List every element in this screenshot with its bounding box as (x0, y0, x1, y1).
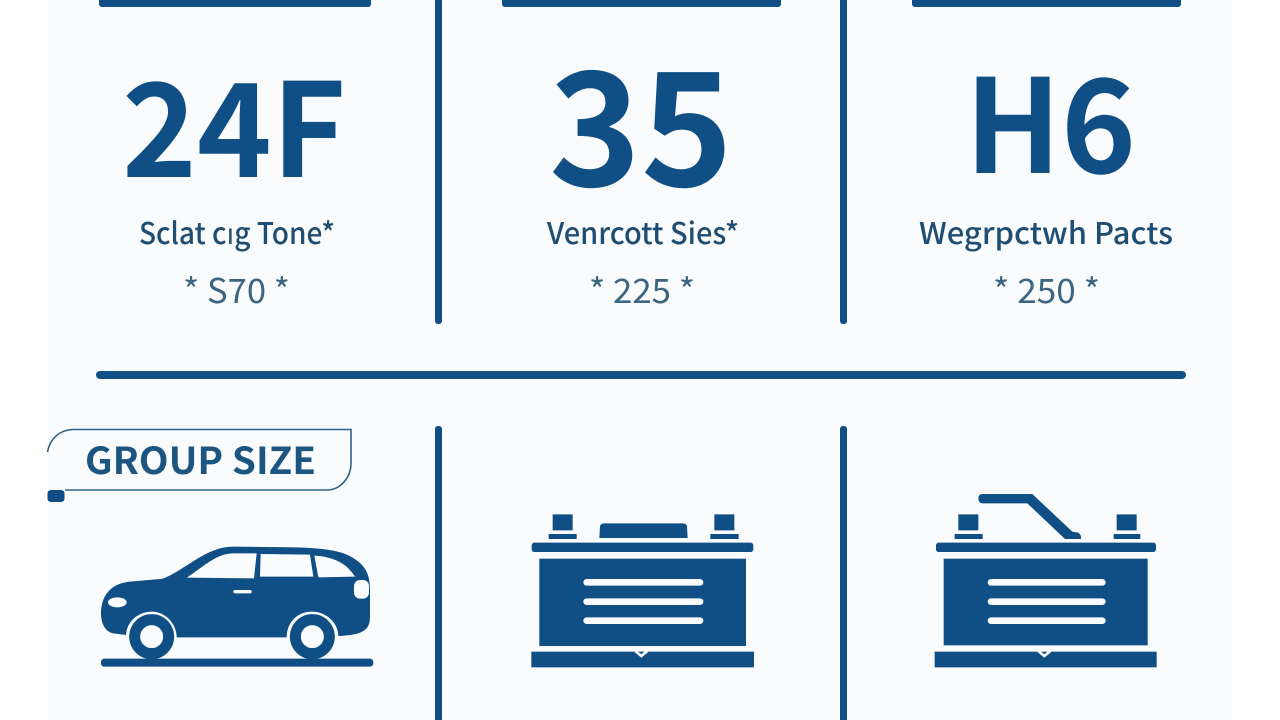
car body (101, 547, 370, 637)
panel: 24F column (99, 0, 371, 313)
value: 24F: * S70 * (183, 264, 290, 313)
lid (936, 543, 1156, 552)
big code: 24F: 24F (122, 27, 346, 215)
base notch (635, 651, 647, 656)
headlight (108, 597, 127, 607)
top bar (912, 0, 1181, 7)
big code: 35: 35 (549, 3, 733, 232)
handle (978, 494, 1081, 539)
icon: battery with handle (935, 494, 1157, 667)
front wheel (135, 620, 169, 654)
centre cap (599, 523, 688, 538)
tail light (354, 580, 369, 599)
top bar (502, 0, 781, 7)
vent lines (988, 579, 1106, 624)
case (944, 559, 1148, 645)
base notch (1038, 651, 1050, 656)
icon: battery with cap (531, 514, 754, 667)
icon: car (101, 547, 373, 667)
panel: 35 column (502, 0, 781, 313)
base plate (935, 652, 1157, 667)
big code: H6: H6 (965, 23, 1136, 211)
case (539, 559, 746, 646)
panel: H6 column (912, 0, 1181, 313)
value: 35: * 225 * (589, 264, 695, 313)
top bar (99, 0, 371, 7)
value: H6: * 250 * (993, 264, 1100, 313)
base plate (531, 652, 754, 667)
rear wheel (295, 620, 329, 654)
vent lines (583, 579, 703, 624)
tag outline (48, 430, 351, 490)
label: 24F: Sclat cıg Tone* (139, 209, 335, 253)
terminals (549, 514, 739, 539)
ground line (101, 659, 373, 667)
label: H6: Wegrpctwh Pacts (919, 209, 1173, 253)
tag foot (48, 490, 64, 502)
door handle (233, 590, 252, 593)
label: 35: Venrcott Sies* (546, 209, 739, 253)
heading text: GROUP SIZE (85, 431, 316, 485)
windows (187, 553, 355, 578)
terminals (955, 514, 1140, 539)
heading tag: group size (48, 430, 351, 502)
lid (532, 543, 753, 552)
